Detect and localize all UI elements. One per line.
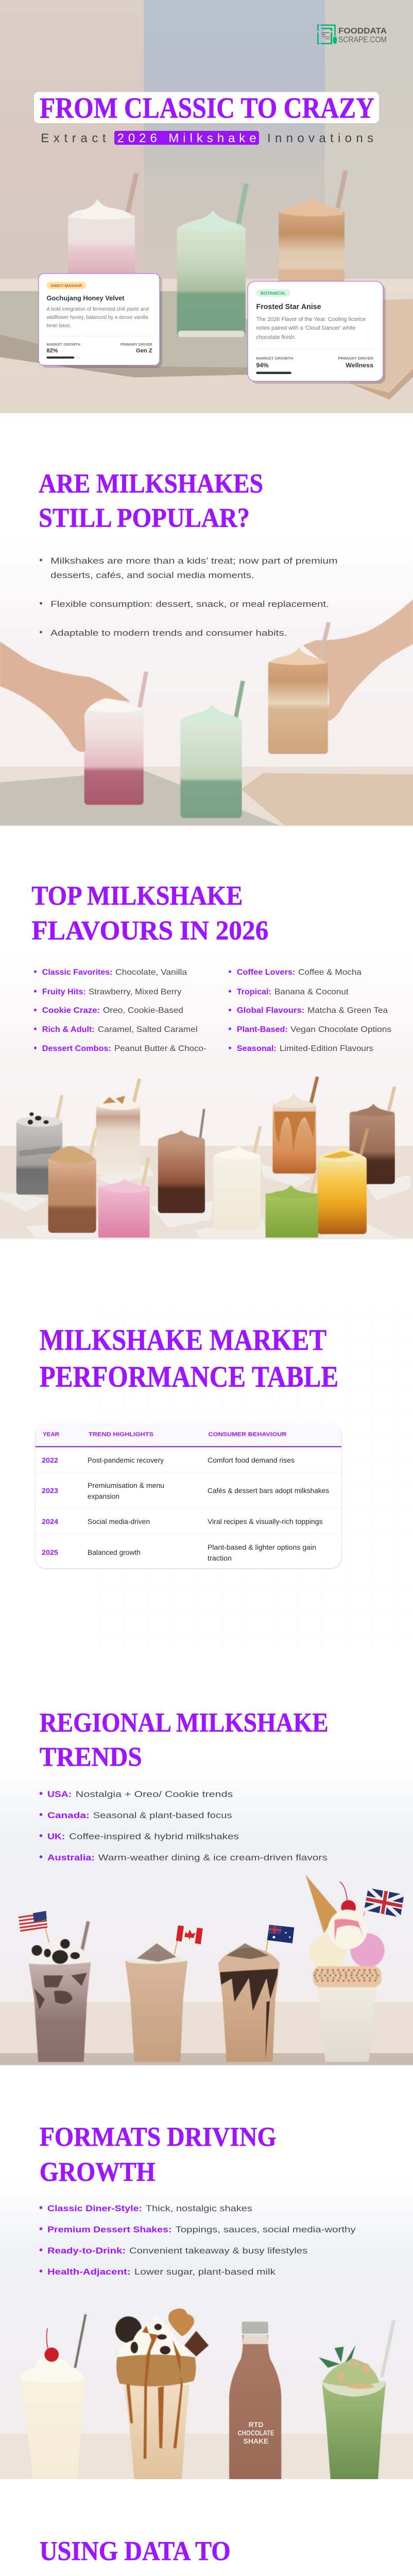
row 2025: traction bbox=[208, 1554, 232, 1562]
flavour list: right column: Global Flavours: bbox=[237, 1006, 304, 1015]
title: FROM CLASSIC TO CRAZY bbox=[40, 92, 374, 125]
bullet list: Adaptable to modern trends and consumer habits. bbox=[50, 628, 287, 638]
heading: PERFORMANCE TABLE bbox=[40, 1360, 338, 1393]
formats list: Convenient takeaway & busy lifestyles bbox=[129, 2246, 307, 2256]
row 2022: Comfort food demand rises bbox=[208, 1456, 295, 1464]
USA flag bbox=[18, 1911, 49, 1942]
card: Frosted Star Anise: PRIMARY DRIVER bbox=[338, 356, 374, 361]
hero photo: linen backdrop and three milkshakes on a stone slab bbox=[0, 0, 413, 413]
card: Frosted Star Anise: The 2026 Flavor of the Year. Cooling licorice bbox=[256, 316, 366, 323]
regional list: Seasonal & plant-based focus bbox=[93, 1810, 232, 1820]
regional list: Australia: bbox=[47, 1853, 95, 1862]
bullet list: Milkshakes are more than a kids’ treat; now part of premium bbox=[50, 556, 338, 566]
heading: TOP MILKSHAKE bbox=[31, 881, 243, 911]
flavour list: right column: Seasonal: bbox=[237, 1044, 277, 1053]
UK flag bbox=[364, 1888, 404, 1918]
row 2025: Plant-based & lighter options gain bbox=[208, 1543, 316, 1551]
subtitle: Innovations bbox=[267, 131, 373, 145]
card: Gochujang Honey Velvet: Gochujang Honey Velvet bbox=[46, 294, 125, 302]
flavour list: right column: Limited-Edition Flavours bbox=[280, 1044, 373, 1053]
card: Frosted Star Anise: 94% bbox=[256, 362, 269, 369]
card: Gochujang Honey Velvet: 82% bbox=[46, 348, 58, 354]
row 2023: Premiumisation & menu bbox=[88, 1481, 164, 1489]
logo: FoodData Scrape (hero): SCRAPE.COM bbox=[338, 36, 387, 44]
heading: ARE MILKSHAKES bbox=[39, 469, 263, 499]
panel: top milkshake flavours bbox=[0, 826, 413, 1240]
card: Frosted Star Anise: MARKET GROWTH bbox=[256, 356, 294, 361]
formats list: Classic Diner-Style: bbox=[47, 2204, 142, 2213]
table header bbox=[43, 1431, 287, 1437]
heading: REGIONAL MILKSHAKE bbox=[40, 1708, 329, 1738]
card: Gochujang Honey Velvet: Gen Z bbox=[136, 348, 152, 354]
flavour list: left column: Classic Favorites: bbox=[42, 968, 112, 977]
flavour list: left column: Dessert Combos: bbox=[42, 1044, 111, 1053]
bottle label: RTD bbox=[249, 2420, 263, 2429]
flavour list: right column: Matcha & Green Tea bbox=[307, 1006, 388, 1015]
row 2025 bbox=[42, 1543, 316, 1562]
heading: FORMATS DRIVING bbox=[40, 2122, 277, 2152]
regional list bbox=[40, 1789, 328, 1862]
bottle label: CHOCOLATE bbox=[238, 2429, 274, 2437]
flavour list: left column bbox=[34, 968, 206, 1053]
Canada flag bbox=[175, 1925, 203, 1954]
row 2022 bbox=[42, 1456, 295, 1464]
row 2023: Cafés & dessert bars adopt milkshakes bbox=[208, 1486, 329, 1495]
subtitle: Extract bbox=[41, 131, 106, 145]
logo: FoodData Scrape (hero) bbox=[317, 24, 387, 44]
flavour list: left column: Rich & Adult: bbox=[42, 1025, 95, 1034]
flavour list: left column: Caramel, Salted Caramel bbox=[98, 1025, 198, 1034]
row 2024: Social media-driven bbox=[88, 1517, 150, 1526]
panel: market performance table bbox=[0, 1240, 413, 1649]
bullet list: desserts, cafés, and social media moments. bbox=[50, 570, 254, 580]
panel: hero bbox=[0, 0, 413, 413]
card: Frosted Star Anise: notes paired with a 'Cloud Dancer' white bbox=[256, 325, 355, 331]
heading: TRENDS bbox=[40, 1742, 142, 1772]
bullet list: Flexible consumption: dessert, snack, or meal replacement. bbox=[50, 599, 329, 609]
formats list: Health-Adjacent: bbox=[47, 2267, 131, 2277]
heading: GROWTH bbox=[40, 2157, 156, 2187]
flavour list: right column: Vegan Chocolate Options bbox=[290, 1025, 391, 1034]
row 2022: Post-pandemic recovery bbox=[88, 1456, 164, 1464]
subtitle bbox=[41, 131, 373, 145]
regional list: Canada: bbox=[47, 1810, 90, 1820]
row 2022: 2022 bbox=[42, 1456, 58, 1464]
panel: regional milkshake trends bbox=[0, 1649, 413, 2066]
formats list bbox=[40, 2204, 356, 2277]
card: Gochujang Honey Velvet: SWICY MASHUP bbox=[50, 283, 82, 288]
table header: YEAR bbox=[43, 1431, 59, 1437]
heading bbox=[31, 881, 268, 946]
flavour list: right column: Banana & Coconut bbox=[274, 988, 349, 996]
panel: formats driving growth bbox=[0, 2066, 413, 2480]
subtitle: 2026 Milkshake bbox=[117, 131, 256, 145]
card: Gochujang Honey Velvet bbox=[39, 274, 162, 368]
photo: four regional milkshakes with flags bbox=[0, 1875, 413, 2065]
row 2024: Viral recipes & visually-rich toppings bbox=[208, 1517, 322, 1526]
Australia flag bbox=[266, 1925, 294, 1952]
heading: USING DATA TO bbox=[40, 2536, 231, 2566]
table header: CONSUMER BEHAVIOUR bbox=[208, 1431, 287, 1437]
panel: are milkshakes still popular bbox=[0, 413, 413, 826]
heading bbox=[40, 1708, 329, 1772]
card: Gochujang Honey Velvet: PRIMARY DRIVER bbox=[121, 343, 152, 347]
heading: FLAVOURS IN 2026 bbox=[31, 916, 268, 946]
bottle label bbox=[238, 2420, 274, 2445]
regional list: Nostalgia + Oreo/ Cookie trends bbox=[76, 1789, 233, 1799]
heading: STILL POPULAR? bbox=[39, 503, 250, 533]
formats list: Thick, nostalgic shakes bbox=[146, 2204, 252, 2213]
flavour list: right column: Coffee Lovers: bbox=[237, 968, 295, 977]
photo: hands holding three milkshakes bbox=[0, 599, 413, 826]
heading bbox=[39, 469, 263, 533]
panel: using data to track trends bbox=[0, 2479, 413, 2576]
formats list: Premium Dessert Shakes: bbox=[47, 2225, 171, 2234]
formats list: Toppings, sauces, social media-worthy bbox=[176, 2225, 356, 2234]
card: Frosted Star Anise: Frosted Star Anise bbox=[256, 302, 321, 311]
flavour list: left column: Fruity Hits: bbox=[42, 988, 86, 996]
bullet list bbox=[40, 556, 338, 638]
card: Frosted Star Anise: Wellness bbox=[346, 362, 373, 369]
card: Frosted Star Anise bbox=[248, 281, 386, 384]
flavour list: left column: Oreo, Cookie-Based bbox=[103, 1006, 183, 1015]
flavour list: left column: Peanut Butter & Choco- bbox=[114, 1044, 206, 1053]
card: Gochujang Honey Velvet: A bold integration of fermented chili paste and bbox=[46, 307, 149, 312]
heading bbox=[40, 1323, 338, 1393]
regional list: UK: bbox=[47, 1832, 65, 1841]
regional list: USA: bbox=[47, 1789, 72, 1799]
card: Frosted Star Anise: chocolate finish. bbox=[256, 334, 296, 341]
heading bbox=[40, 2122, 277, 2187]
row 2025: 2025 bbox=[42, 1548, 58, 1556]
formats list: Lower sugar, plant-based milk bbox=[134, 2267, 276, 2277]
flavour list: right column: Tropical: bbox=[237, 988, 271, 996]
table header: TREND HIGHLIGHTS bbox=[89, 1431, 153, 1437]
flavour list: right column: Plant-Based: bbox=[237, 1025, 288, 1034]
row 2023 bbox=[42, 1481, 329, 1500]
flavour list: left column: Cookie Craze: bbox=[42, 1006, 100, 1015]
heading: MILKSHAKE MARKET bbox=[40, 1323, 326, 1357]
regional list: Warm-weather dining & ice cream-driven flavors bbox=[98, 1853, 328, 1862]
flavour list: right column bbox=[229, 968, 391, 1053]
regional list: Coffee-inspired & hybrid milkshakes bbox=[69, 1832, 239, 1841]
card: Frosted Star Anise: BOTANICAL bbox=[261, 291, 286, 296]
row 2023: 2023 bbox=[42, 1486, 58, 1495]
row 2024: 2024 bbox=[42, 1517, 58, 1526]
card: Gochujang Honey Velvet: MARKET GROWTH bbox=[46, 343, 80, 347]
flavour list: left column: Strawberry, Mixed Berry bbox=[89, 988, 181, 996]
performance table bbox=[35, 1423, 342, 1569]
photo: ten milkshakes on coasters bbox=[0, 1077, 413, 1238]
photo: four milkshake formats bbox=[0, 2309, 413, 2480]
card: Gochujang Honey Velvet: wildflower honey, balanced by a dense vanilla bbox=[46, 315, 148, 320]
row 2024 bbox=[42, 1517, 322, 1526]
row 2023: expansion bbox=[88, 1492, 119, 1500]
row 2025: Balanced growth bbox=[88, 1548, 141, 1556]
bottle label: SHAKE bbox=[243, 2437, 269, 2445]
formats list: Ready-to-Drink: bbox=[47, 2246, 126, 2256]
logo: FoodData Scrape (hero): FOODDATA bbox=[338, 27, 387, 36]
flavour list: right column: Coffee & Mocha bbox=[298, 968, 362, 977]
flavour list: left column: Chocolate, Vanilla bbox=[115, 968, 187, 977]
card: Gochujang Honey Velvet: bean base. bbox=[46, 323, 71, 329]
